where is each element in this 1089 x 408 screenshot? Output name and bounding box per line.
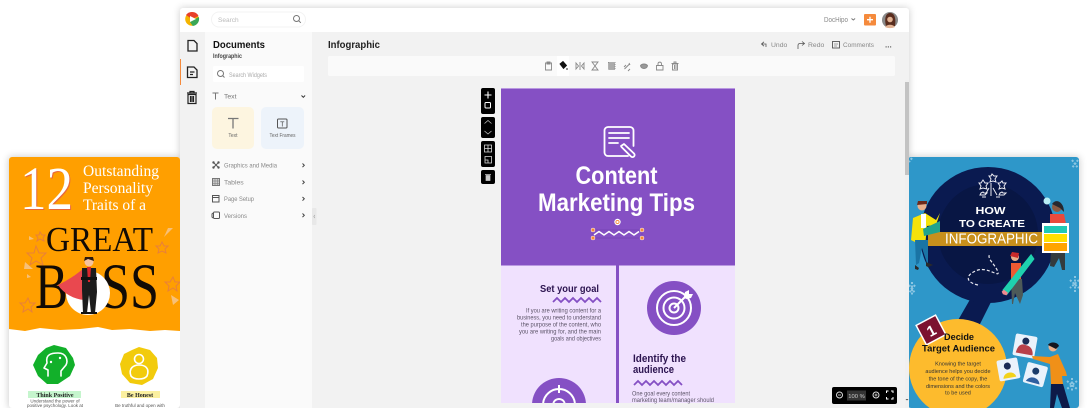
icon: think positive — [33, 345, 75, 384]
heading: identify the audience — [633, 353, 686, 376]
column divider — [616, 265, 619, 403]
add button — [864, 14, 876, 26]
search box — [212, 12, 306, 27]
toolbar icons — [546, 62, 678, 71]
title: B SS: B — [35, 251, 68, 323]
text: think positive description — [27, 398, 84, 408]
heading: decide target audience: Decide — [944, 332, 974, 343]
header panel — [501, 88, 735, 266]
decorative fireworks — [979, 174, 1006, 197]
text: be honest description: Be truthful and open with — [115, 403, 165, 408]
heading: identify the audience: Identify the — [633, 353, 686, 365]
top bar — [180, 8, 909, 32]
format toolbar — [328, 56, 895, 76]
icon: new document — [188, 40, 197, 51]
zigzag: identify the audience — [634, 381, 682, 385]
zigzag: set your goal — [553, 298, 601, 302]
text: identify the audience description: marketing team/manager should — [632, 397, 714, 404]
heading: outstanding personality traits: Outstanding — [83, 163, 159, 180]
element toolbar: add and copy — [481, 88, 495, 114]
title: how to create infographic: TO CREATE — [959, 218, 1025, 230]
widget tile: text frames: Text Frames — [270, 133, 296, 139]
widget tile: text frames: T — [280, 122, 285, 128]
sidebar — [205, 32, 316, 408]
collapse handle — [312, 208, 316, 225]
icon: DocHipo logo — [185, 12, 199, 26]
menu: page setup: Page Setup — [224, 196, 254, 203]
icon: be honest — [120, 347, 158, 385]
selected tool highlight — [557, 56, 569, 76]
label: be honest — [121, 391, 160, 398]
heading: identify the audience: audience — [633, 364, 674, 376]
badge: step number 1: 1 — [924, 322, 939, 341]
menu: tables: Tables — [224, 180, 244, 186]
avatar — [882, 12, 898, 28]
text: set your goal description: you are writing for, and the main — [519, 328, 601, 336]
number 12: 12 — [20, 156, 73, 223]
scrollbar — [905, 80, 909, 408]
selected zigzag with handles — [591, 219, 644, 240]
banner: infographic: INFOGRAPHIC — [945, 230, 1038, 248]
dashed path arrow — [968, 254, 998, 285]
dark magnifier circle — [920, 167, 1056, 303]
widget tile: text frames — [261, 107, 304, 149]
title: B SS — [36, 265, 156, 308]
text: set your goal description: goals and objectives — [551, 336, 601, 342]
text: step description: dimensions and the colors — [926, 384, 990, 390]
number 12: 12 — [21, 157, 74, 224]
text: think positive description: positive psychology. Look at — [27, 403, 84, 408]
heading: set your goal: Set your goal — [540, 283, 599, 295]
text: step description: audience helps you decide — [925, 369, 991, 375]
menu: tables — [212, 178, 304, 186]
panel: left infographic card, Great Boss — [9, 156, 180, 408]
menu: graphics and media: Graphics and Media — [224, 162, 277, 170]
magnifier handle — [958, 300, 990, 324]
title: how to create infographic: HOW — [976, 205, 1006, 217]
element toolbar: order — [481, 117, 495, 138]
section: identify the audience — [632, 353, 714, 404]
action: redo: Redo — [808, 42, 824, 49]
text: step description: Knowing the target — [935, 362, 981, 368]
text: set your goal description — [517, 308, 601, 342]
section: text — [212, 93, 305, 100]
menu: versions — [212, 212, 304, 220]
label: think positive — [28, 391, 81, 398]
heading: infographic: Infographic — [328, 39, 380, 51]
text: step description — [925, 362, 991, 396]
action: undo — [762, 42, 787, 49]
subheading: infographic: Infographic — [213, 54, 243, 60]
icon: trash — [187, 92, 197, 104]
decorative snowflakes — [909, 158, 1079, 392]
menu: versions: Versions — [224, 213, 248, 220]
heading: outstanding personality traits — [83, 164, 159, 210]
action: more: ... — [885, 40, 892, 50]
number 12 — [24, 168, 72, 210]
widget tile: text — [212, 107, 254, 149]
panel: right infographic card, How to create infographic — [908, 157, 1079, 408]
text: set your goal description: If you are writing content for a — [526, 308, 601, 314]
text: step description: the tone of the copy, the — [929, 376, 987, 382]
action: comments: Comments — [843, 42, 875, 49]
element toolbar: grid and resize — [481, 141, 495, 167]
text: identify the audience description: One goal every content — [632, 390, 690, 398]
action: comments — [832, 42, 875, 49]
heading: decide target audience: Target Audience — [922, 344, 995, 354]
search widgets box: Search Widgets — [229, 73, 267, 79]
search widgets box — [213, 66, 304, 82]
title: B SS: SS — [101, 251, 159, 323]
heading: documents: Documents — [213, 39, 265, 51]
illustration: person with pencil — [1003, 252, 1033, 304]
action: undo: Undo — [771, 42, 787, 49]
title: content marketing tips: Marketing Tips — [538, 189, 695, 217]
decorative triangles — [24, 228, 179, 305]
menu: graphics and media — [212, 161, 304, 170]
illustration: person with laptop — [911, 201, 940, 270]
text: set your goal description: the purpose of the content, who — [521, 322, 601, 328]
heading: decide target audience — [922, 334, 995, 354]
chart board — [1042, 223, 1069, 253]
icon: content document with pencil — [604, 127, 635, 157]
icon: crosshair circle — [532, 378, 586, 403]
illustration: man pointing — [1032, 342, 1070, 408]
label: be honest: Be Honest — [127, 393, 153, 399]
title: content marketing tips: Content — [576, 162, 658, 190]
text: think positive description: Understand the power of — [30, 398, 80, 404]
title: GREAT: GREAT — [46, 220, 153, 259]
heading: outstanding personality traits: Traits of a — [83, 197, 146, 214]
element toolbar: delete — [481, 170, 495, 184]
zoom control — [832, 387, 897, 404]
icon rail — [180, 32, 205, 408]
search box: Search — [218, 17, 239, 24]
zoom control: 100 % — [848, 394, 865, 400]
document canvas — [501, 88, 735, 404]
heading: outstanding personality traits: Personality — [83, 180, 153, 197]
decorative stars — [20, 232, 180, 312]
title: content marketing tips — [538, 162, 695, 217]
illustration: audience photo tiles — [996, 333, 1048, 387]
section: text: Text — [224, 94, 237, 100]
widget tile: text: Text — [228, 133, 238, 139]
text: set your goal description: business, you need to understand — [517, 314, 601, 322]
panel: editor window — [180, 8, 909, 408]
icon: target with arrow — [647, 281, 701, 335]
label: think positive: Think Positive — [36, 393, 74, 399]
active rail item — [180, 59, 181, 85]
menu: page setup — [212, 196, 304, 203]
text: identify the audience description — [632, 390, 714, 404]
badge: step number 1 — [916, 315, 946, 345]
yellow circle — [909, 319, 1007, 408]
banner: infographic — [928, 232, 1042, 246]
illustration: boss with cape — [58, 257, 110, 315]
account menu: DocHipo — [824, 15, 848, 24]
icon: documents — [188, 67, 197, 78]
illustration: person with chart board — [1044, 198, 1066, 270]
section: set your goal — [517, 283, 601, 342]
action: redo — [798, 42, 824, 49]
title: how to create infographic — [959, 207, 1025, 227]
text: step description: to be used — [945, 390, 971, 396]
